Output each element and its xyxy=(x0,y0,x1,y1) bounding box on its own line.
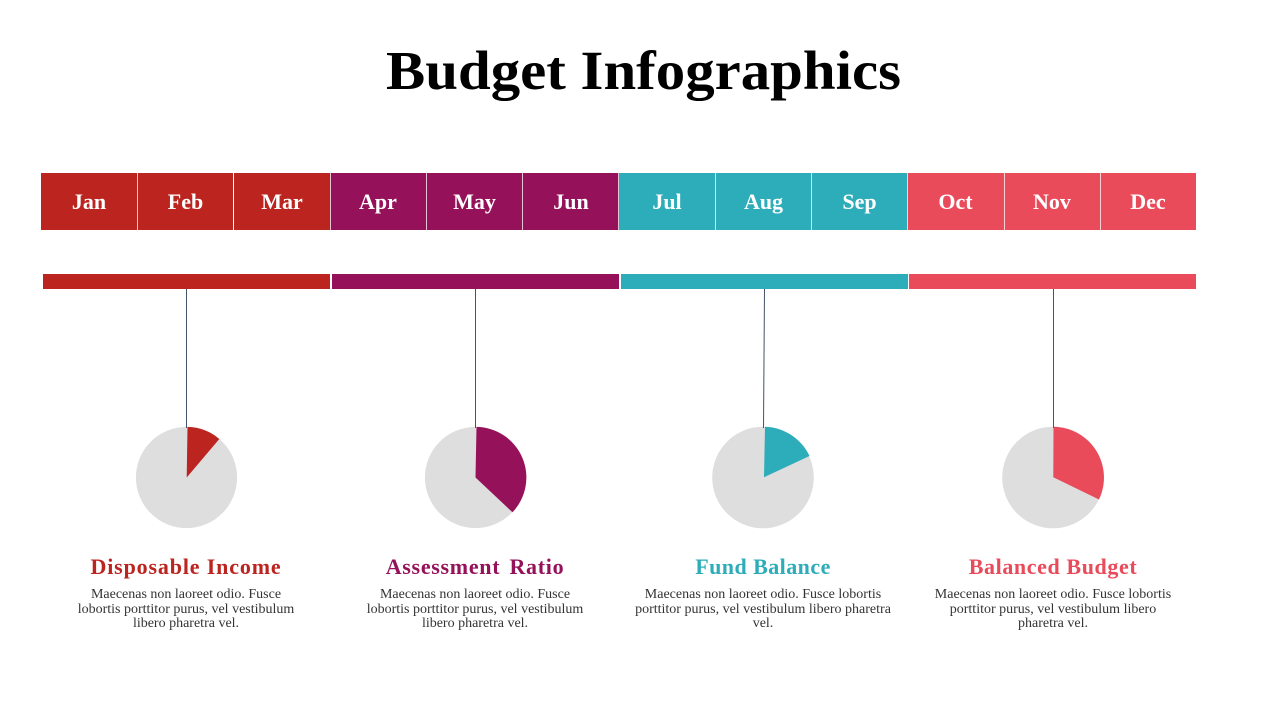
month timeline xyxy=(41,173,1196,230)
quarter bar: coral xyxy=(909,274,1196,289)
pie chart: balanced budget xyxy=(1002,427,1104,528)
month: Aug: Aug xyxy=(744,189,783,214)
month: Dec xyxy=(1100,173,1196,230)
pie chart: assessment ratio xyxy=(425,427,526,528)
month: May xyxy=(426,173,523,230)
text: Assessment Ratio xyxy=(367,587,584,631)
connector: disposable income xyxy=(186,289,188,428)
text: Assessment Ratio: libero pharetra vel. xyxy=(422,616,528,631)
text: Balanced Budget: pharetra vel. xyxy=(1018,616,1088,631)
text: Disposable Income: lobortis porttitor purus, vel vestibulum xyxy=(78,602,294,616)
quarter bar: purple xyxy=(332,274,619,289)
text: Balanced Budget xyxy=(935,587,1171,631)
connector: assessment ratio xyxy=(474,289,476,428)
month: Aug xyxy=(715,173,812,230)
text: Fund Balance xyxy=(635,587,891,631)
text: Fund Balance: vel. xyxy=(753,616,773,631)
month: Jul: Jul xyxy=(652,189,682,214)
month: Nov: Nov xyxy=(1033,189,1071,214)
month: Oct: Oct xyxy=(938,189,973,214)
month: Mar: Mar xyxy=(261,189,303,214)
text: Fund Balance: porttitor purus, vel vestibulum libero pharetra xyxy=(635,602,891,616)
month: Feb: Feb xyxy=(168,189,203,214)
heading: Disposable Income: Disposable Income xyxy=(90,554,282,579)
text: Fund Balance: Maecenas non laoreet odio. Fusce lobortis xyxy=(645,587,881,602)
heading: Balanced Budget: Balanced Budget xyxy=(969,554,1137,579)
month: Mar xyxy=(234,173,330,230)
quarter bar: teal xyxy=(621,274,908,289)
pie chart: disposable income xyxy=(136,427,237,528)
month: Oct xyxy=(907,173,1004,230)
text: Disposable Income: Maecenas non laoreet odio. Fusce xyxy=(91,587,281,602)
month: Jan: Jan xyxy=(72,189,106,214)
text: Disposable Income xyxy=(78,587,294,631)
text: Balanced Budget: porttitor purus, vel vestibulum libero xyxy=(950,602,1156,616)
text: Assessment Ratio: lobortis porttitor purus, vel vestibulum xyxy=(367,602,583,616)
month: Sep: Sep xyxy=(842,189,877,214)
quarter bar: red xyxy=(43,274,330,289)
text: Assessment Ratio: Maecenas non laoreet odio. Fusce xyxy=(380,587,570,602)
title: Budget Infographics xyxy=(386,40,901,101)
connector: fund balance xyxy=(764,289,765,428)
month: Jul xyxy=(619,173,715,230)
month: Feb xyxy=(137,173,234,230)
heading: Assessment Ratio: Assessment Ratio xyxy=(386,554,564,579)
text: Disposable Income: libero pharetra vel. xyxy=(133,616,239,631)
month: Jun: Jun xyxy=(553,189,589,214)
heading: Fund Balance: Fund Balance xyxy=(695,554,831,579)
month: Jan xyxy=(41,173,137,230)
month: Apr: Apr xyxy=(359,189,397,214)
month: May: May xyxy=(453,189,496,214)
month: Dec: Dec xyxy=(1130,189,1166,214)
month: Jun xyxy=(523,173,619,230)
month: Sep xyxy=(811,173,908,230)
connector: balanced budget xyxy=(1052,289,1054,428)
text: Balanced Budget: Maecenas non laoreet odio. Fusce lobortis xyxy=(935,587,1171,602)
month: Nov xyxy=(1004,173,1100,230)
pie chart: fund balance xyxy=(712,427,814,528)
month: Apr xyxy=(330,173,426,230)
